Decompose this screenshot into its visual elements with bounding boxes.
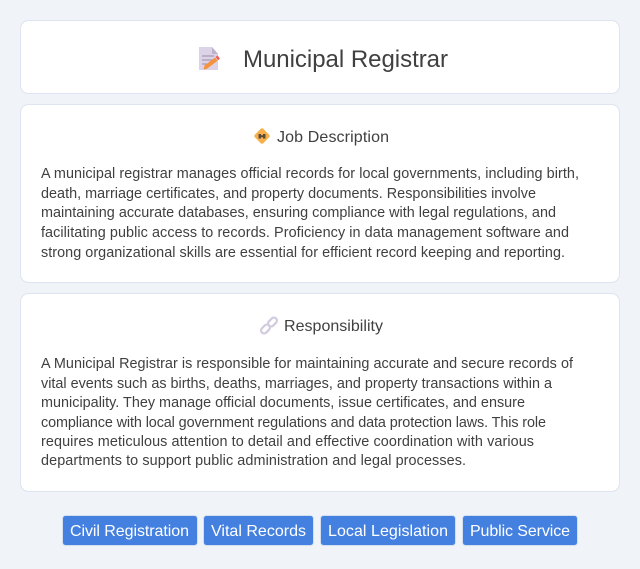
text block: job description: maintaining accurate databases, ensuring compliance with legal regulations, and: [41, 205, 556, 221]
text block: responsibility: departments to support public administration and legal processes.: [41, 453, 466, 469]
panel: responsibility: [20, 294, 620, 492]
heading: Job Description: Job Description: [277, 129, 389, 146]
icon: chain link: [260, 316, 278, 335]
tag: Public Service: [462, 516, 578, 546]
heading: Responsibility: Responsibility: [284, 318, 383, 335]
tag: Public Service: Public Service: [470, 523, 570, 540]
text block: job description: [41, 166, 579, 261]
text block: job description: strong organizational skills are essential for efficient record keeping and reporting.: [41, 245, 565, 261]
heading: Municipal Registrar: Municipal Registrar: [243, 46, 448, 73]
tag: Civil Registration: Civil Registration: [70, 523, 189, 540]
tag: Local Legislation: Local Legislation: [328, 523, 448, 540]
text block: responsibility: compliance with local government regulations and data protection laws. This role: [41, 415, 546, 431]
tag: Local Legislation: [320, 516, 456, 546]
text block: responsibility: requires meticulous attention to detail and effective coordination with various: [41, 434, 534, 450]
panel: job description: [20, 104, 620, 282]
text block: job description: death, marriage certificates, and property documents. Responsibilities involve: [41, 186, 536, 202]
tag: Vital Records: [204, 516, 314, 546]
text block: responsibility: [41, 356, 574, 469]
text block: responsibility: municipality. They manage official documents, issue certificates, and ensure: [41, 395, 525, 411]
icon: document with pencil: [199, 47, 220, 70]
panel: title: [20, 20, 620, 94]
text block: responsibility: A Municipal Registrar is responsible for maintaining accurate and secure records of: [41, 356, 574, 372]
tag: Civil Registration: [62, 516, 198, 546]
text block: job description: facilitating public access to records. Proficiency in data management software and: [41, 225, 569, 241]
text block: job description: A municipal registrar manages official records for local governments, including birth,: [41, 166, 579, 182]
tag: Vital Records: Vital Records: [211, 523, 306, 540]
icon: diamond sign: [254, 128, 270, 144]
text block: responsibility: vital events such as births, deaths, marriages, and property transactions within a: [41, 376, 552, 392]
